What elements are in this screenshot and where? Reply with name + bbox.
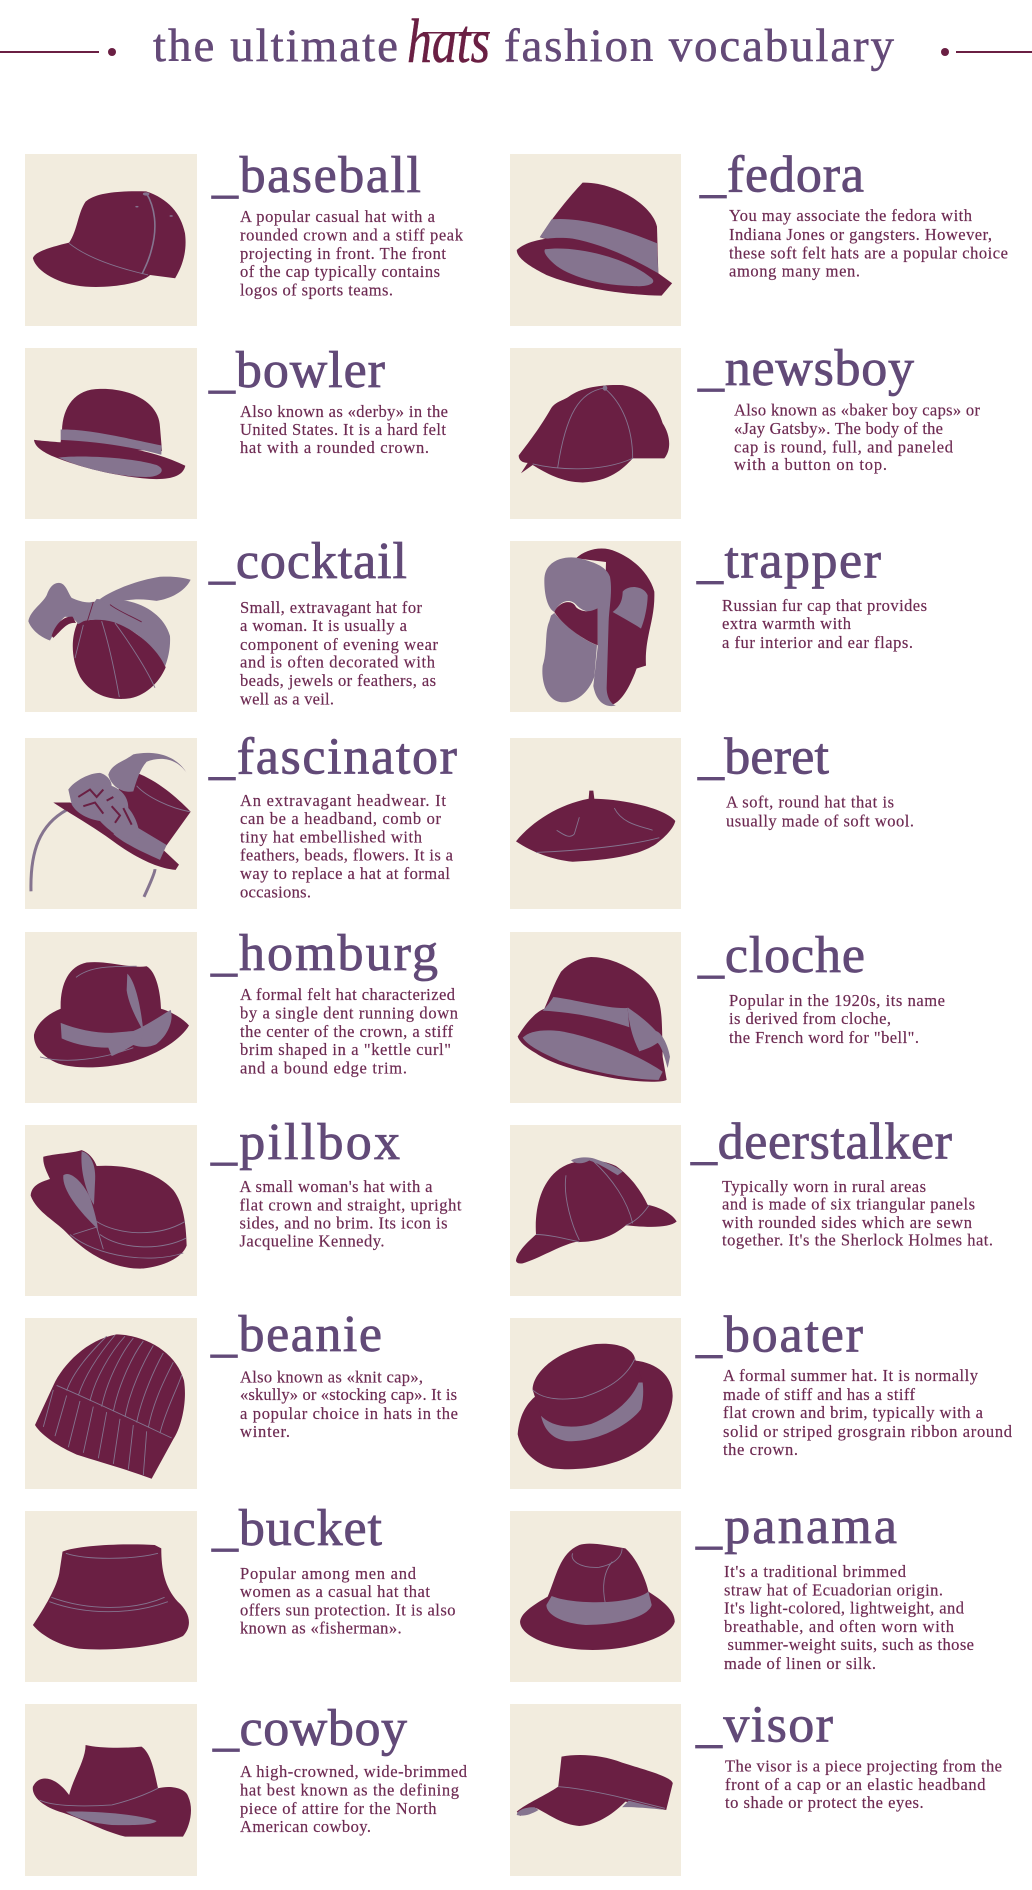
description: cocktail: component of evening wear: [240, 635, 438, 654]
heading: homburg: _homburg: [210, 925, 438, 982]
description: visor: [725, 1757, 1002, 1812]
description: cocktail: [240, 598, 438, 708]
icon: newsboy cap: [519, 385, 669, 482]
description: fedora: these soft felt hats are a popular choice: [729, 244, 1008, 263]
description: homburg: and a bound edge trim.: [240, 1058, 407, 1078]
heading: visor: _visor: [695, 1697, 833, 1754]
description: homburg: A formal felt hat characterized: [240, 985, 456, 1004]
description: boater: the crown.: [723, 1440, 798, 1459]
description: pillbox: Jacqueline Kennedy.: [240, 1232, 384, 1251]
heading: newsboy: _newsboy: [697, 340, 914, 397]
description: newsboy: «Jay Gatsby». The body of the: [734, 419, 943, 438]
description: cowboy: American cowboy.: [240, 1817, 371, 1836]
description: panama: It's a traditional brimmed: [724, 1562, 907, 1581]
description: beret: [726, 793, 914, 830]
description: cloche: is derived from cloche,: [729, 1009, 891, 1028]
icon: boater: [518, 1344, 673, 1469]
description: cowboy: hat best known as the defining: [240, 1781, 459, 1800]
description: panama: summer-weight suits, such as those: [728, 1635, 974, 1654]
panel: beanie: [25, 1306, 458, 1489]
icon: beret: [516, 791, 675, 862]
heading: panama: _panama: [695, 1498, 897, 1555]
description: baseball: of the cap typically contains: [240, 262, 440, 281]
description: bucket: known as «fisherman».: [240, 1619, 402, 1638]
icon: pillbox: [31, 1150, 187, 1269]
description: fedora: among many men.: [729, 262, 860, 281]
description: newsboy: Also known as «baker boy caps» or: [734, 400, 980, 420]
description: trapper: extra warmth with: [722, 614, 852, 633]
icon: deerstalker: [516, 1157, 677, 1264]
description: cowboy: piece of attire for the North: [240, 1799, 437, 1818]
icon: panama: [520, 1544, 675, 1650]
description: deerstalker: with rounded sides which are sewn: [722, 1213, 972, 1232]
panel: cloche: [510, 927, 945, 1103]
description: cloche: Popular in the 1920s, its name: [729, 991, 945, 1010]
heading: beanie: _beanie: [210, 1306, 382, 1363]
description: fascinator: can be a headband, comb or: [240, 809, 442, 828]
heading: boater: _boater: [695, 1307, 863, 1364]
icon: trapper hat: [542, 549, 654, 706]
icon: cowboy hat: [33, 1745, 191, 1837]
description: bowler: Also known as «derby» in the: [240, 402, 448, 421]
description: fedora: You may associate the fedora with: [729, 206, 973, 225]
description: visor: The visor is a piece projecting from the: [725, 1757, 1002, 1776]
description: fascinator: tiny hat embellished with: [240, 827, 423, 846]
icon: bucket hat: [33, 1544, 189, 1650]
icon: homburg: [34, 962, 189, 1067]
description: homburg: by a single dent running down: [240, 1003, 458, 1022]
icon: cocktail hat: [28, 577, 191, 699]
description: trapper: Russian fur cap that provides: [722, 596, 927, 615]
description: boater: flat crown and brim, typically with a: [723, 1403, 984, 1422]
description: fedora: [729, 206, 1008, 281]
panel: pillbox: [25, 1114, 462, 1296]
panel: baseball: [25, 147, 464, 326]
description: beret: usually made of soft wool.: [726, 812, 914, 830]
icon: cloche: [518, 957, 670, 1082]
description: beanie: Also known as «knit cap»,: [240, 1368, 423, 1386]
description: trapper: a fur interior and ear flaps.: [722, 633, 913, 652]
heading: baseball: _baseball: [211, 147, 421, 204]
description: cocktail: beads, jewels or feathers, as: [240, 671, 436, 690]
description: panama: straw hat of Ecuadorian origin.: [724, 1581, 943, 1600]
description: panama: breathable, and often worn with: [724, 1617, 955, 1636]
description: beanie: «skully» or «stocking cap». It is: [240, 1385, 457, 1404]
description: newsboy: with a button on top.: [734, 455, 887, 474]
description: boater: made of stiff and has a stiff: [723, 1385, 916, 1404]
icon: fedora: [517, 183, 672, 296]
heading: cloche: _cloche: [697, 927, 865, 984]
panel: homburg: [25, 925, 458, 1103]
description: bucket: [240, 1564, 456, 1638]
heading: deerstalker: _deerstalker: [690, 1114, 952, 1171]
panel: cocktail: [25, 533, 438, 712]
panel: boater: [510, 1307, 1013, 1489]
description: cocktail: and is often decorated with: [240, 652, 436, 671]
panel: fascinator: [25, 729, 457, 909]
description: boater: solid or striped grosgrain ribbon around: [723, 1422, 1013, 1441]
description: homburg: the center of the crown, a stiff: [240, 1022, 454, 1041]
description: bowler: United States. It is a hard felt: [240, 420, 446, 439]
description: cowboy: [240, 1762, 468, 1836]
description: panama: made of linen or silk.: [724, 1654, 876, 1673]
description: fascinator: feathers, beads, flowers. It is a: [240, 846, 454, 864]
right title rule: [941, 48, 1032, 56]
heading: trapper: _trapper: [696, 532, 881, 590]
description: panama: [724, 1562, 974, 1673]
description: deerstalker: together. It's the Sherlock Holmes hat.: [722, 1231, 993, 1250]
description: fascinator: [240, 791, 454, 902]
description: bucket: women as a casual hat that: [240, 1582, 430, 1601]
description: baseball: A popular casual hat with a: [240, 207, 436, 226]
heading: bowler: _bowler: [208, 342, 385, 399]
description: panama: It's light-colored, lightweight, and: [724, 1599, 965, 1618]
description: fascinator: An extravagant headwear. It: [240, 791, 446, 810]
description: baseball: [240, 207, 464, 299]
description: cowboy: A high-crowned, wide-brimmed: [240, 1762, 468, 1781]
heading: pillbox: _pillbox: [210, 1114, 400, 1171]
description: deerstalker: and is made of six triangular panels: [722, 1195, 975, 1214]
title: [153, 8, 894, 76]
description: beanie: [240, 1368, 458, 1441]
panel: bowler: [25, 342, 448, 519]
panel: visor: [510, 1697, 1002, 1876]
description: homburg: [240, 985, 458, 1078]
description: baseball: rounded crown and a stiff peak: [240, 226, 464, 245]
panel: beret: [510, 729, 914, 909]
icon: bowler: [34, 389, 185, 479]
description: trapper: [722, 596, 927, 652]
heading: beret: _beret: [697, 729, 830, 786]
icon: visor: [517, 1755, 673, 1826]
description: deerstalker: Typically worn in rural areas: [722, 1177, 926, 1196]
description: fascinator: way to replace a hat at formal: [240, 864, 450, 883]
description: newsboy: [734, 400, 980, 474]
description: bowler: [240, 402, 448, 457]
panel: deerstalker: [510, 1114, 993, 1296]
description: cloche: [729, 991, 945, 1047]
description: homburg: brim shaped in a "kettle curl": [240, 1040, 451, 1059]
description: cloche: the French word for "bell".: [729, 1028, 919, 1047]
icon: beanie: [35, 1334, 185, 1479]
description: deerstalker: [722, 1177, 993, 1250]
description: baseball: projecting in front. The front: [240, 244, 446, 263]
panel: panama: [510, 1498, 974, 1682]
title: hats: [407, 8, 490, 76]
description: cocktail: a woman. It is usually a: [240, 616, 408, 635]
heading: fascinator: _fascinator: [208, 729, 457, 786]
panel: bucket: [25, 1500, 456, 1682]
description: pillbox: A small woman's hat with a: [240, 1177, 433, 1196]
description: pillbox: sides, and no brim. Its icon is: [240, 1214, 448, 1232]
heading: cocktail: _cocktail: [208, 533, 407, 590]
heading: cowboy: _cowboy: [212, 1700, 407, 1757]
title: the ultimate: [153, 20, 398, 72]
description: newsboy: cap is round, full, and paneled: [734, 438, 954, 456]
description: pillbox: flat crown and straight, upright: [240, 1195, 462, 1214]
heading: bucket: _bucket: [211, 1500, 383, 1557]
description: bucket: Popular among men and: [240, 1564, 417, 1583]
description: bucket: offers sun protection. It is also: [240, 1601, 456, 1620]
panel: fedora: [510, 147, 1008, 326]
description: beanie: winter.: [240, 1422, 290, 1441]
description: cocktail: well as a veil.: [240, 689, 334, 708]
description: pillbox: [240, 1177, 462, 1251]
description: baseball: logos of sports teams.: [240, 280, 393, 299]
icon: fascinator: [31, 753, 191, 897]
heading: fedora: _fedora: [699, 147, 864, 204]
left title rule: [0, 48, 116, 56]
description: fascinator: occasions.: [240, 882, 311, 902]
description: boater: A formal summer hat. It is normally: [723, 1366, 979, 1385]
description: visor: front of a cap or an elastic headband: [725, 1775, 986, 1794]
description: fedora: Indiana Jones or gangsters. However,: [729, 225, 992, 244]
panel: cowboy: [25, 1700, 468, 1876]
panel: newsboy: [510, 340, 980, 519]
icon: baseball cap: [33, 191, 186, 287]
description: visor: to shade or protect the eyes.: [725, 1793, 924, 1812]
description: boater: [723, 1366, 1013, 1459]
description: beret: A soft, round hat that is: [726, 793, 894, 812]
description: beanie: a popular choice in hats in the: [240, 1404, 458, 1423]
title: fashion vocabulary: [504, 20, 894, 72]
description: bowler: hat with a rounded crown.: [240, 438, 429, 457]
description: cocktail: Small, extravagant hat for: [240, 598, 422, 617]
panel: trapper: [510, 532, 927, 712]
